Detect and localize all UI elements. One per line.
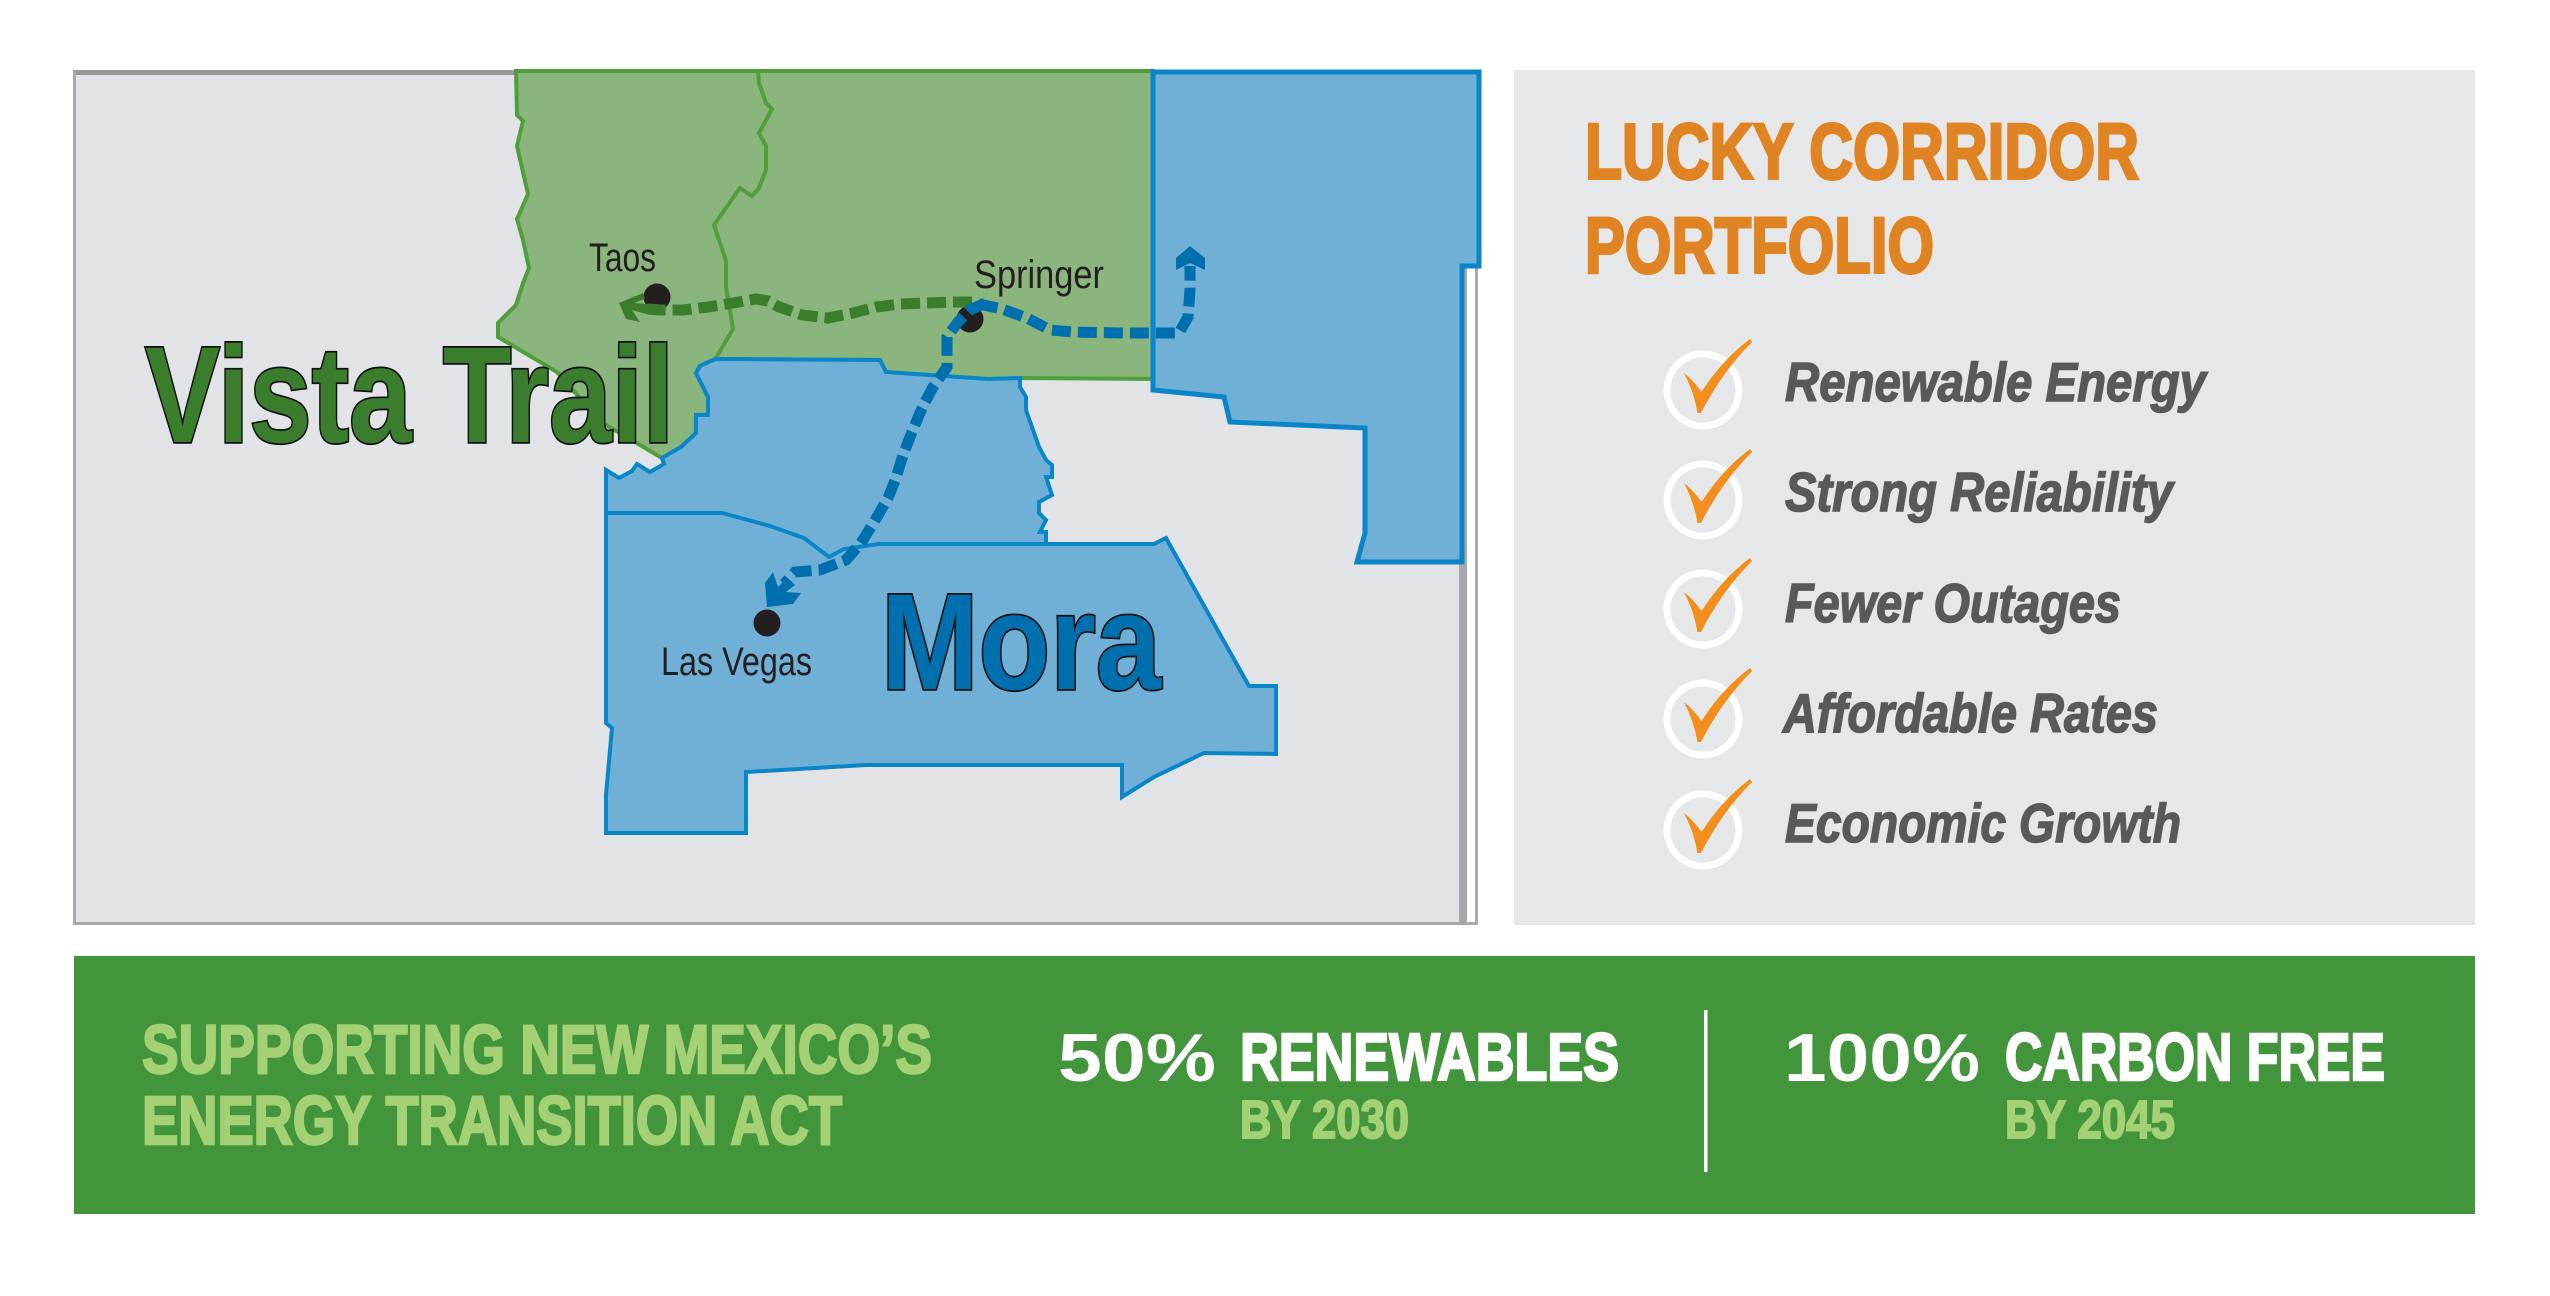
stat: 100% carbon free by 2045: 100% xyxy=(1784,1020,1980,1096)
heading: Supporting New Mexico's Energy Transition Act: ENERGY TRANSITION ACT xyxy=(142,1082,842,1159)
check item: Renewable Energy: Renewable Energy xyxy=(1785,351,2208,413)
heading: Lucky Corridor Portfolio: LUCKY CORRIDOR xyxy=(1585,106,2139,196)
check item: Economic Growth xyxy=(1667,779,2181,866)
city marker: Taos xyxy=(644,284,670,310)
check item: Affordable Rates: Affordable Rates xyxy=(1781,682,2158,744)
check item: Economic Growth: Economic Growth xyxy=(1785,792,2181,854)
region: Mora service territory xyxy=(606,72,1479,833)
city marker: Las Vegas xyxy=(754,610,780,636)
check item: Fewer Outages: Fewer Outages xyxy=(1785,572,2121,634)
heading: Supporting New Mexico's Energy Transition Act: SUPPORTING NEW MEXICO’S xyxy=(142,1011,932,1088)
city marker: Springer xyxy=(956,306,984,332)
check item: Fewer Outages xyxy=(1667,558,2121,645)
stat: 50% renewables by 2030: BY 2030 xyxy=(1240,1090,1409,1150)
heading: Supporting New Mexico's Energy Transition Act xyxy=(142,1011,932,1159)
stat: 50% renewables by 2030: RENEWABLES xyxy=(1240,1020,1619,1095)
heading: Vista Trail: Vista Trail xyxy=(145,319,674,472)
label: Taos: Taos xyxy=(589,236,656,280)
arrow: Vista Trail route from Springer to Taos xyxy=(619,293,972,322)
heading: Lucky Corridor Portfolio: PORTFOLIO xyxy=(1585,200,1934,290)
label: Las Vegas: Las Vegas xyxy=(661,640,812,684)
region: Vista Trail service territory xyxy=(498,71,1153,458)
check item: Affordable Rates xyxy=(1667,668,2158,755)
panel: Lucky Corridor Portfolio xyxy=(1514,70,2475,925)
stat: 50% renewables by 2030 xyxy=(1058,1020,1619,1150)
panel: map xyxy=(73,70,1479,925)
heading: Mora: Mora xyxy=(881,566,1163,719)
stat: 100% carbon free by 2045: CARBON FREE xyxy=(2005,1020,2385,1095)
arrow: Mora route from Springer east xyxy=(979,246,1205,333)
check item: Renewable Energy xyxy=(1667,339,2208,426)
divider xyxy=(1704,1010,1708,1172)
check item: Strong Reliability xyxy=(1667,449,2175,536)
label: Springer: Springer xyxy=(974,253,1104,297)
heading: Lucky Corridor Portfolio xyxy=(1585,106,2139,290)
arrow: Mora route from Springer to Las Vegas xyxy=(765,303,985,607)
stat: 100% carbon free by 2045 xyxy=(1784,1020,2385,1150)
stat: 100% carbon free by 2045: BY 2045 xyxy=(2005,1090,2175,1150)
check item: Strong Reliability: Strong Reliability xyxy=(1785,461,2175,523)
stat: 50% renewables by 2030: 50% xyxy=(1058,1020,1216,1096)
banner: Energy Transition Act goals xyxy=(74,956,2475,1214)
